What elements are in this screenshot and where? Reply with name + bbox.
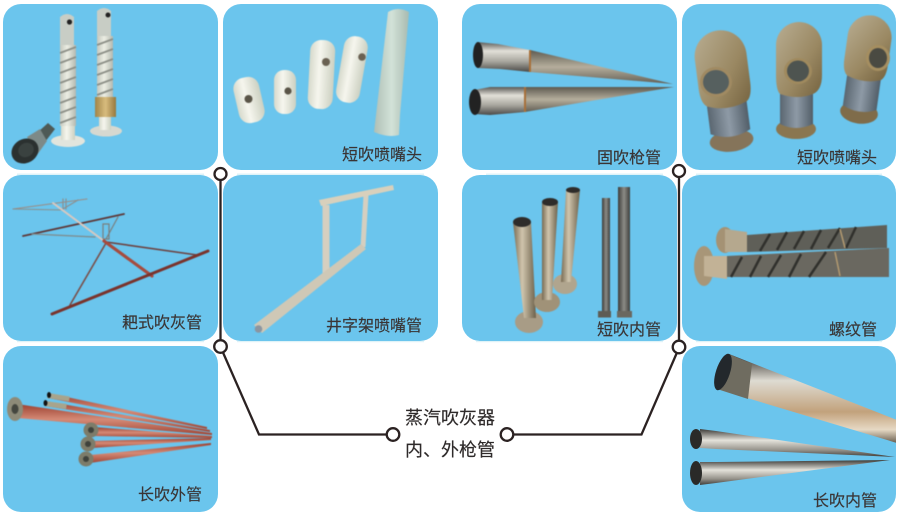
middle nozzle xyxy=(776,22,822,139)
label: 短吹内管 xyxy=(597,321,661,339)
label: 短吹喷嘴头 xyxy=(342,146,422,164)
panel: tic-tac-toe frame nozzle tube xyxy=(254,185,394,333)
panel: spiral tubes xyxy=(7,8,122,168)
panel: threaded tubes xyxy=(694,225,889,286)
panel: long-blower inner tubes xyxy=(690,352,897,485)
dark nozzle xyxy=(7,123,55,168)
central title: 蒸汽吹灰器 xyxy=(405,408,495,428)
tube with flange, left xyxy=(51,14,85,147)
central title: 内、外枪管 xyxy=(405,440,495,460)
connector: left bracket line and nodes xyxy=(214,168,399,441)
connector: right bracket line and nodes xyxy=(501,165,685,441)
label: 长吹内管 xyxy=(813,492,877,510)
label: 长吹外管 xyxy=(138,486,202,504)
tube with brass collar, right xyxy=(90,8,122,136)
central title xyxy=(405,408,495,460)
right nozzle xyxy=(836,12,894,127)
panel: fixed lance tubes xyxy=(469,42,674,115)
panel: rake soot-blower tube xyxy=(13,199,208,314)
panel: cast nozzle heads xyxy=(691,12,894,155)
panel: long-blower outer tubes xyxy=(7,392,212,466)
label: 短吹喷嘴头 xyxy=(797,149,877,167)
large nozzle xyxy=(691,27,759,155)
panel: ceramic nozzle heads xyxy=(231,9,409,136)
label: 螺纹管 xyxy=(829,321,877,339)
label: 井字架喷嘴管 xyxy=(326,317,422,335)
panel: short-blower inner tubes xyxy=(513,187,632,333)
label: 耙式吹灰管 xyxy=(122,314,202,332)
label: 固吹枪管 xyxy=(597,149,661,167)
